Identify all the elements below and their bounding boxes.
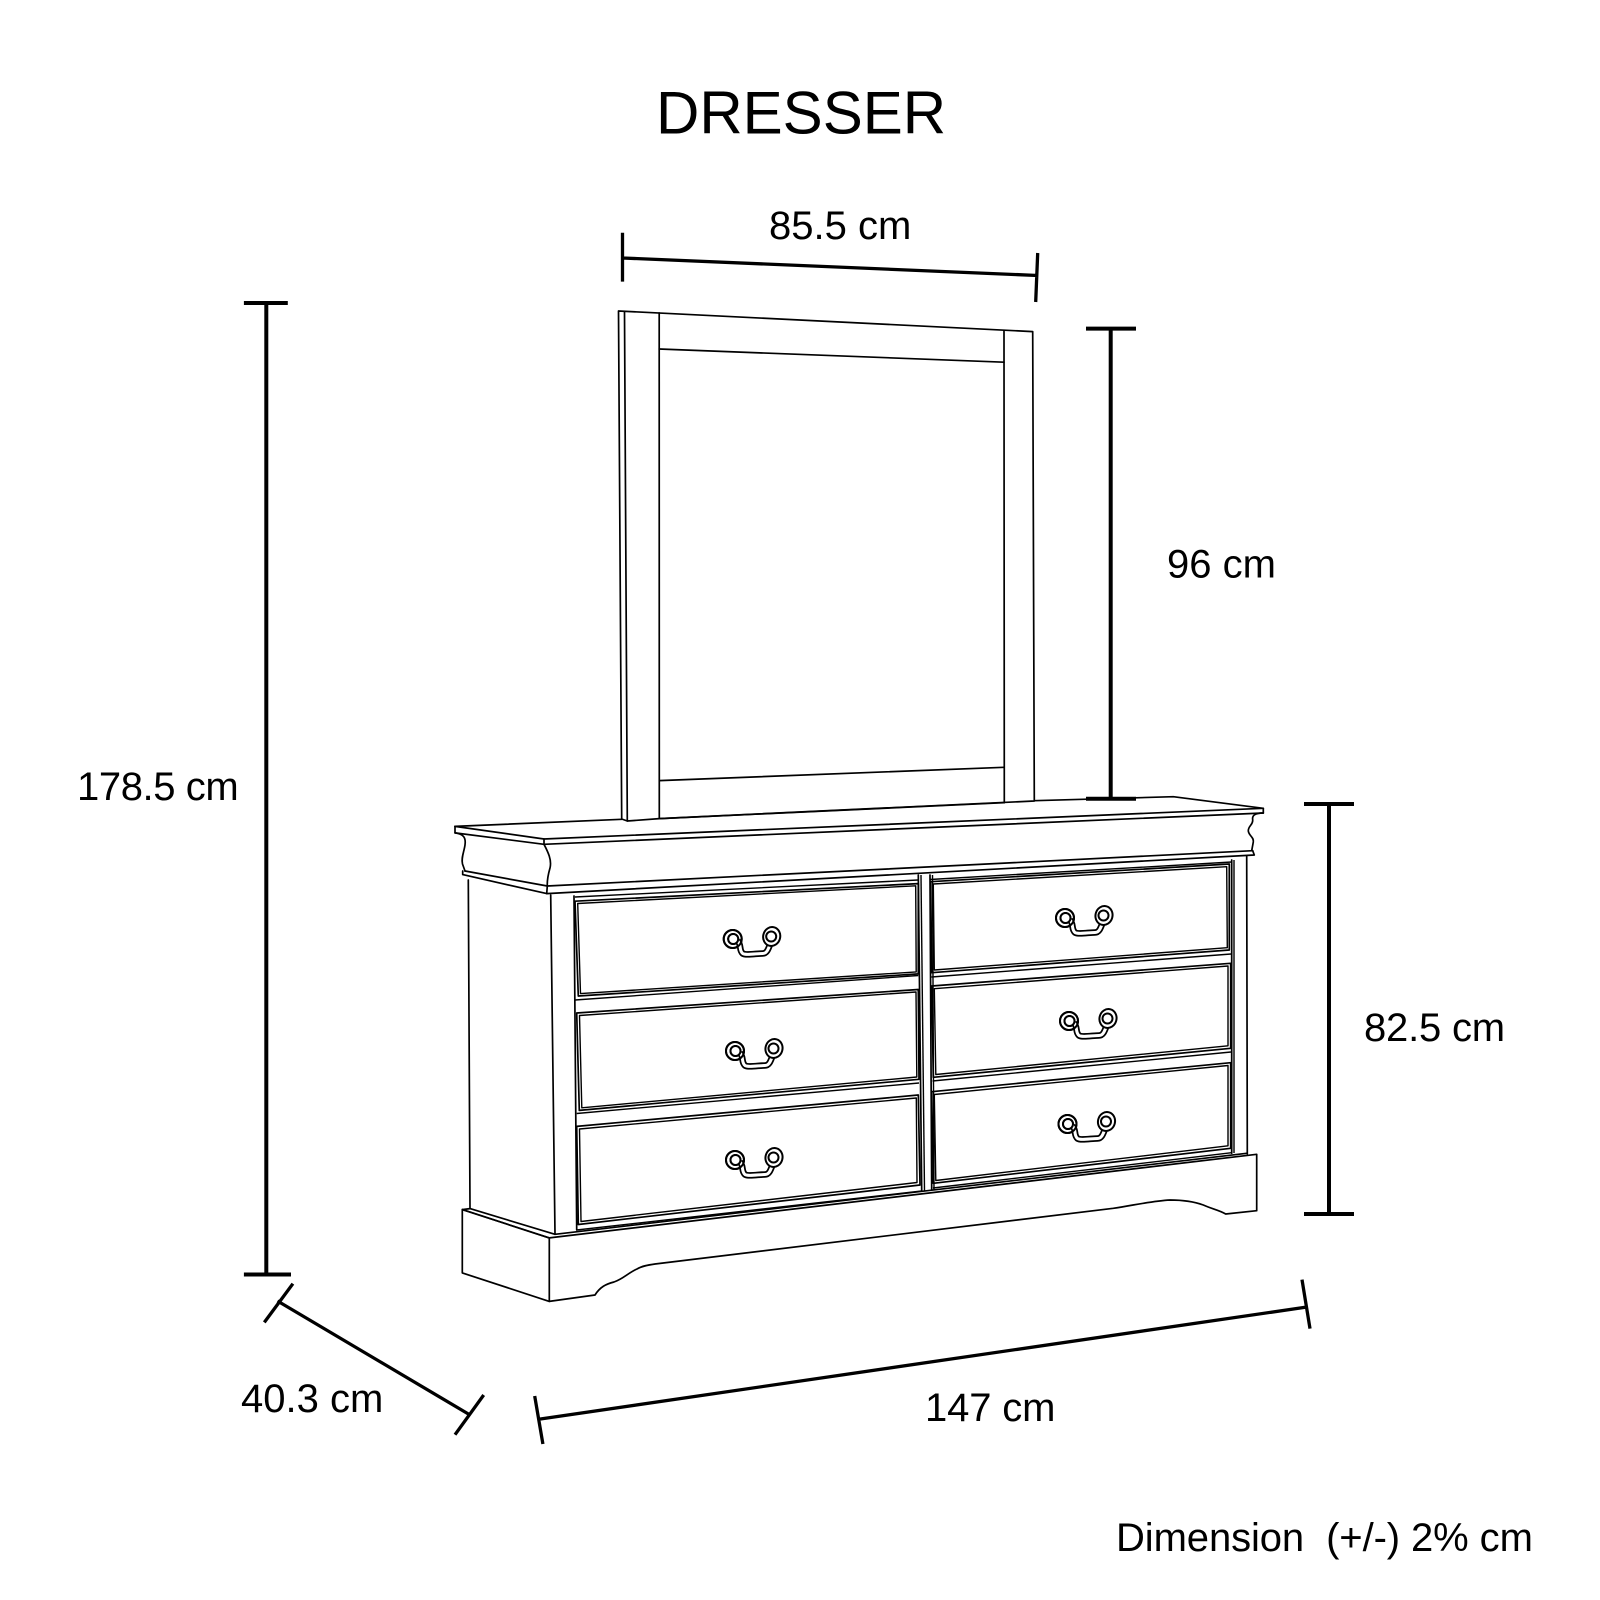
mirror <box>618 311 1034 821</box>
dimension: mirror height <box>1086 329 1276 799</box>
dimension: depth: 40.3 cm <box>241 1377 383 1421</box>
dresser plinth base <box>462 1153 1257 1301</box>
dimension: mirror width: 85.5 cm <box>769 204 911 248</box>
dimension: depth <box>241 1284 484 1435</box>
drawer handles <box>724 904 1119 1175</box>
tolerance note: Dimension (+/-) 2% cm <box>1116 1516 1533 1560</box>
dresser top and cornice <box>455 797 1263 894</box>
dimension: dresser height: 82.5 cm <box>1364 1006 1505 1050</box>
dimension: dresser width: 147 cm <box>925 1386 1055 1430</box>
dimension: mirror width <box>622 204 1038 302</box>
dimension: total height: 178.5 cm <box>77 765 238 809</box>
left drawers <box>575 884 922 1230</box>
dimension: mirror height: 96 cm <box>1167 542 1276 586</box>
dimension: dresser height <box>1304 804 1505 1214</box>
title: DRESSER <box>656 80 946 146</box>
dresser <box>455 797 1263 1301</box>
dimension: total height <box>77 303 291 1274</box>
dimension: dresser width <box>535 1280 1310 1444</box>
dresser side and posts <box>468 856 1247 1234</box>
right drawers <box>931 864 1232 1188</box>
